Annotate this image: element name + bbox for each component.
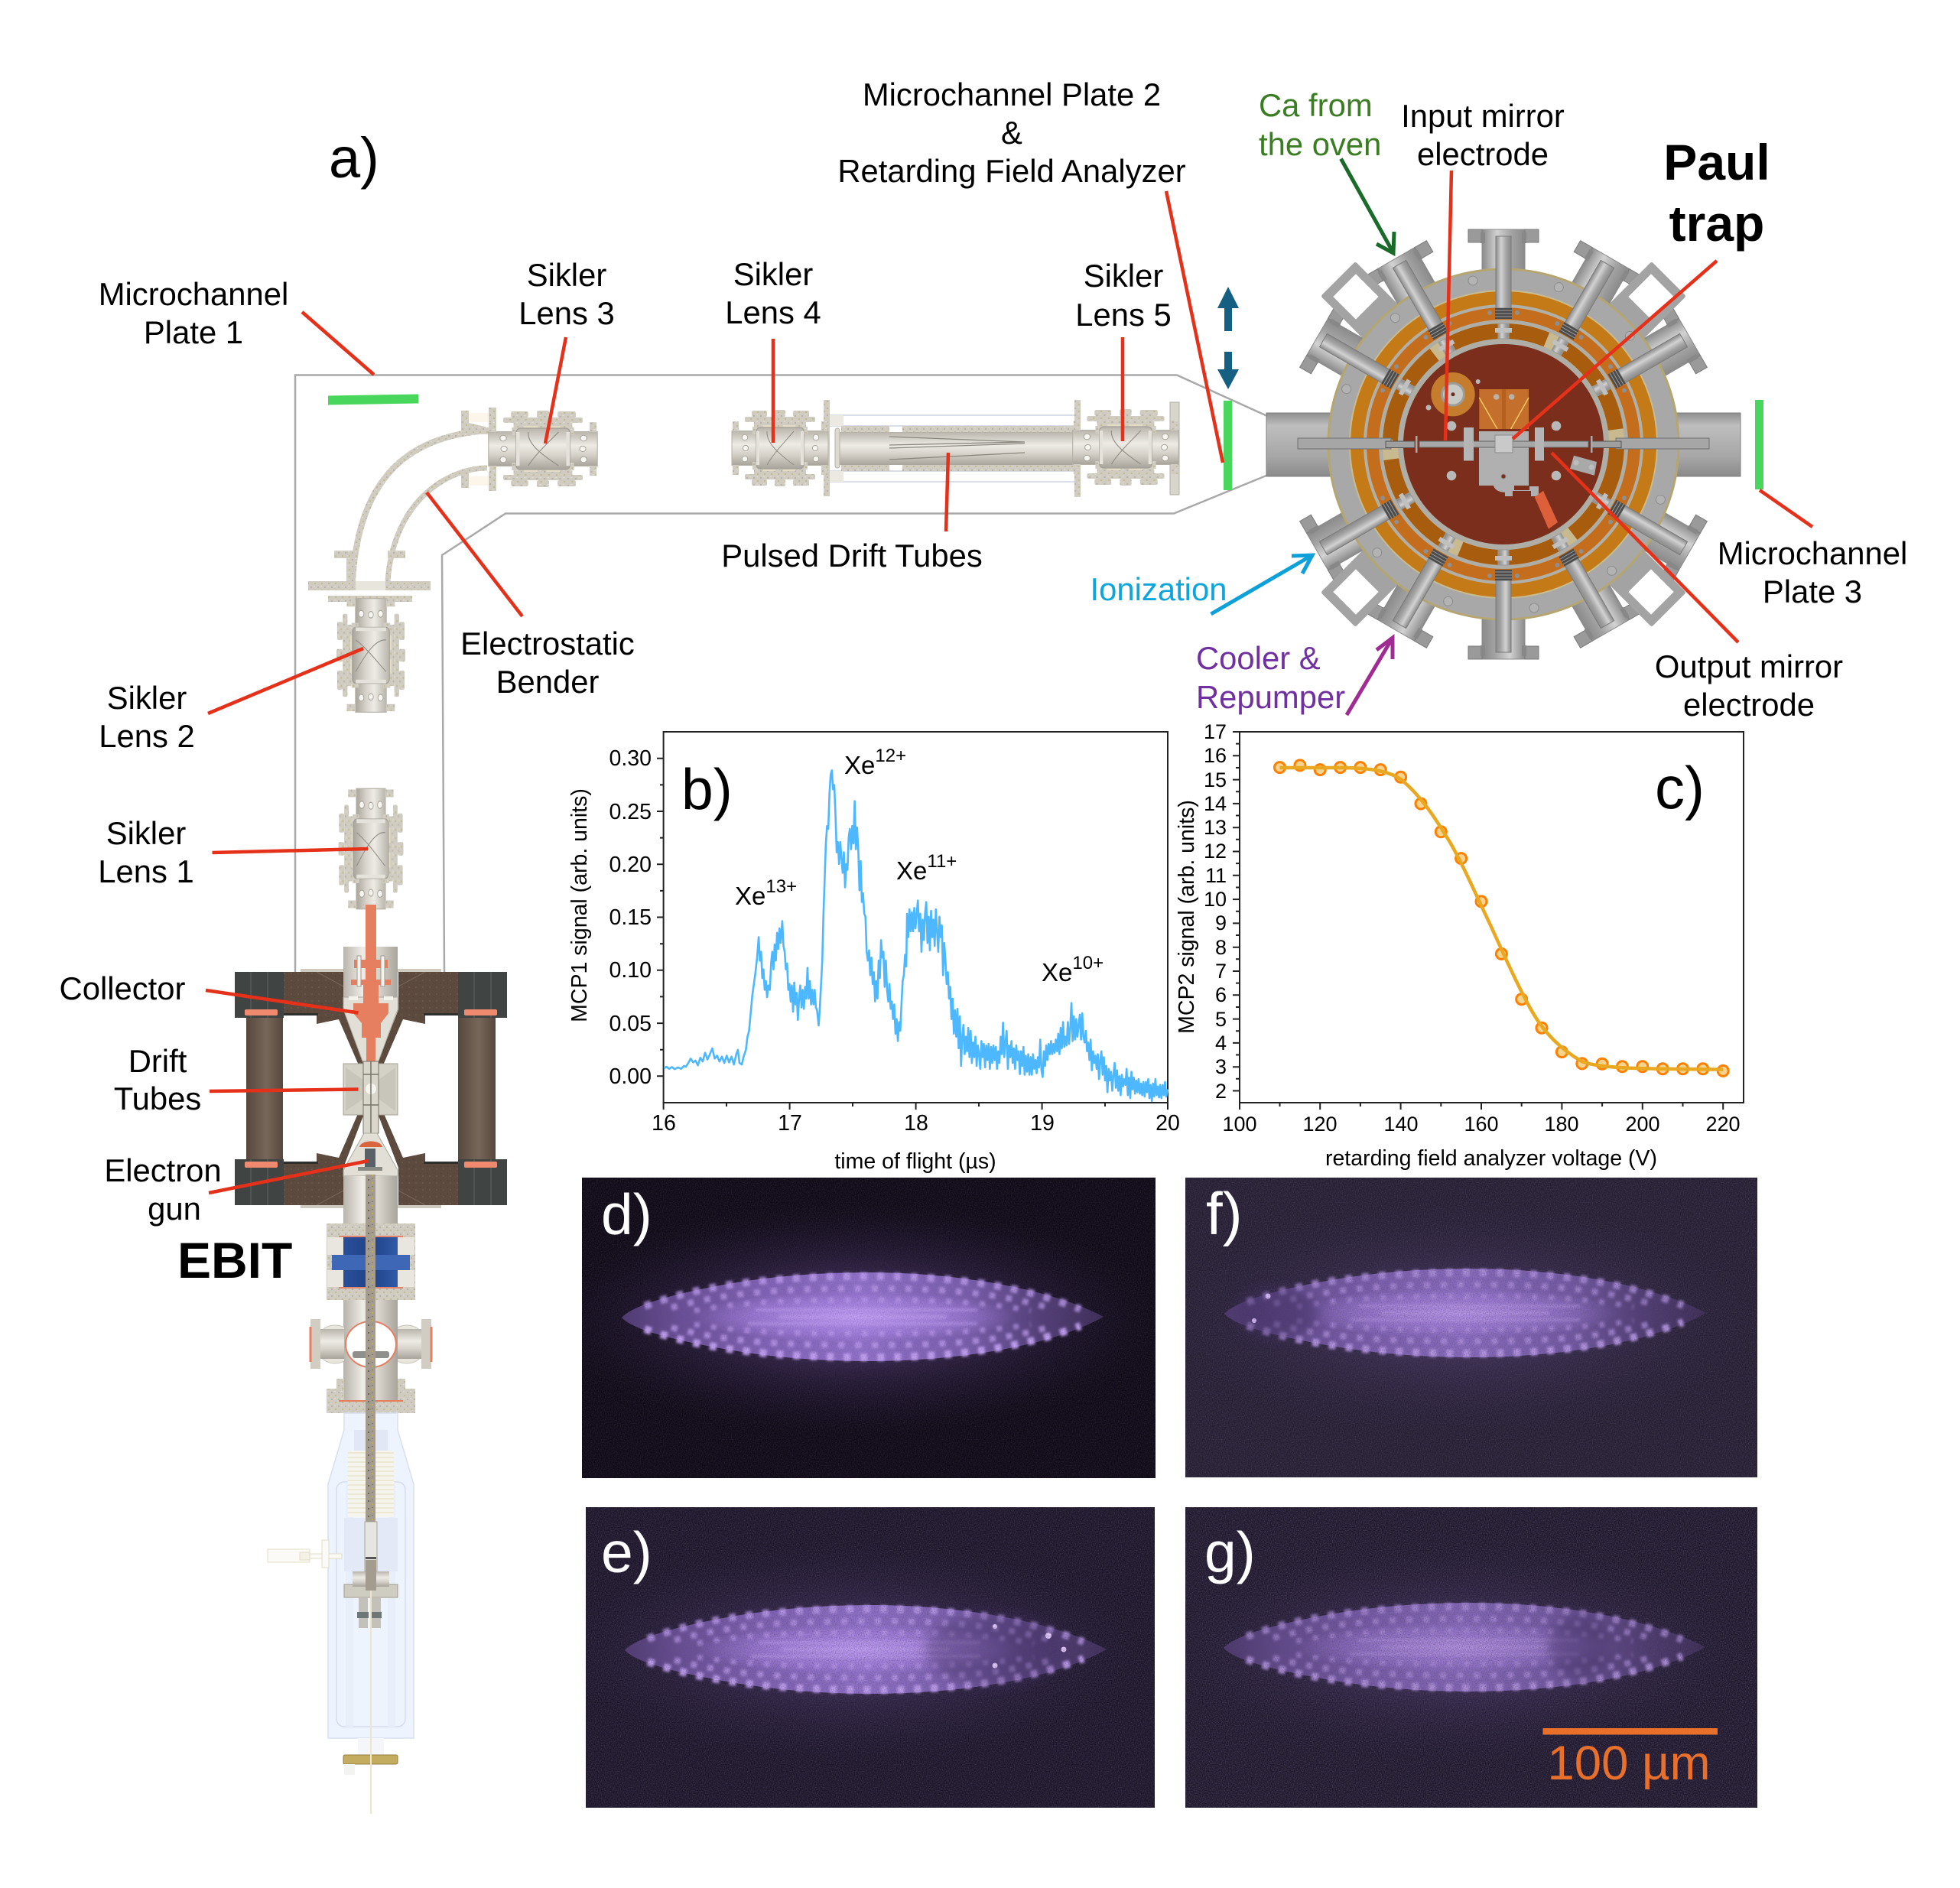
chamber disk and rings [1328, 269, 1679, 619]
panel c: retarding field chart [1175, 720, 1744, 1171]
label: Sikler Lens 5: Lens 5 [1075, 297, 1172, 333]
magnet coil flanges [327, 1223, 415, 1300]
chart b x axis title: time of flight (µs) [834, 1149, 996, 1174]
Sikler lens 3 [489, 411, 597, 487]
data points [1274, 760, 1728, 1076]
chart b y axis labels [609, 746, 652, 1089]
label: Microchannel Plate 1: Microchannel [99, 276, 288, 312]
orange cable [1535, 491, 1558, 529]
chart b y axis labels: 0.05 [609, 1012, 652, 1036]
EBIT assembly [235, 905, 507, 1814]
label: Ionization: Ionization [1091, 571, 1227, 607]
scale bar [1543, 1728, 1718, 1734]
label: Paul trap: trap [1669, 195, 1764, 252]
EBIT columns [246, 1018, 496, 1160]
chart c y axis labels: 15 [1204, 769, 1227, 791]
chart c y axis labels: 16 [1204, 744, 1227, 767]
EBIT magnet plates and cones [235, 969, 507, 1208]
chart b x axis labels [652, 1111, 1180, 1136]
peak label Xe11+: 11+ [927, 851, 957, 872]
peak label Xe10+: Xe [1042, 958, 1072, 986]
label: Microchannel Plate 2 and Retarding Field Analyzer: Microchannel Plate 2 [863, 76, 1161, 112]
peak label Xe10+: 10+ [1072, 953, 1104, 973]
trap mount block [1479, 431, 1539, 496]
electrode rods [1298, 427, 1709, 460]
label: Sikler Lens 4: Lens 4 [725, 294, 821, 330]
chart b frame and ticks [657, 732, 1168, 1110]
arrow: detector moves up [1217, 287, 1239, 331]
chart c x axis labels: 180 [1544, 1113, 1579, 1136]
label: Electrostatic Bender: Bender [496, 664, 599, 700]
peak label Xe13+: 13+ [765, 876, 797, 897]
Sikler lens 2 [336, 599, 405, 712]
label: Sikler Lens 1: Lens 1 [98, 853, 194, 889]
label: Input mirror electrode: Input mirror [1401, 98, 1565, 134]
label: Electrostatic Bender: Electrostatic [460, 626, 635, 661]
Sikler lens 5 [1073, 409, 1178, 486]
Paul trap assembly [1266, 229, 1741, 659]
radial port tubes [1300, 229, 1707, 659]
microchannel plate 3 [1755, 400, 1763, 489]
peak label Xe12+: 12+ [875, 746, 906, 766]
bellows [348, 1451, 394, 1517]
chart b x axis labels: 19 [1030, 1111, 1055, 1136]
label: Ca from the oven: Ca from [1259, 87, 1373, 123]
label: Sikler Lens 4: Sikler [733, 256, 813, 292]
label: Sikler Lens 1: Sikler [106, 815, 186, 851]
calcium oven [1431, 372, 1475, 416]
panel b: time of flight chart [567, 732, 1180, 1174]
beamline outline [295, 375, 1267, 972]
label: Sikler Lens 2: Sikler [107, 680, 187, 716]
chart c x axis title: retarding field analyzer voltage (V) [1325, 1146, 1657, 1171]
chart c x axis labels: 220 [1705, 1113, 1741, 1136]
mounting screws [1425, 379, 1561, 480]
arrow: calcium from oven [1341, 159, 1394, 253]
chart b y axis labels: 0.30 [609, 746, 652, 771]
fit curve [1280, 768, 1723, 1069]
label: Microchannel Plate 3: Microchannel [1718, 535, 1907, 571]
pulsed drift tubes [824, 400, 1179, 497]
chart c y axis labels: 8 [1215, 936, 1227, 959]
side ports and viewing chamber [310, 1301, 431, 1400]
Sikler lens 4 [732, 410, 828, 486]
label: Output mirror electrode: electrode [1683, 687, 1815, 723]
label: Cooler and Repumper: Cooler & [1196, 640, 1321, 676]
chart c y axis labels: 3 [1215, 1055, 1227, 1078]
chart b y axis labels: 0.00 [609, 1064, 652, 1089]
label: Microchannel Plate 2 and Retarding Field Analyzer: Retarding Field Analyzer [837, 153, 1186, 189]
chart c y axis labels: 13 [1204, 816, 1227, 839]
chart c y axis labels: 14 [1204, 792, 1227, 815]
arrow: ionization [1211, 555, 1312, 614]
panel label e: e) [601, 1520, 652, 1584]
chart c y axis labels: 12 [1204, 840, 1227, 863]
chart c x axis labels: 100 [1222, 1113, 1257, 1136]
chart c y axis labels: 6 [1215, 983, 1227, 1006]
label: Drift Tubes: Tubes [114, 1080, 201, 1116]
central feedthrough rod [366, 1175, 375, 1522]
collector [349, 905, 393, 1061]
gold wheel [343, 1591, 398, 1814]
panel f: ion crystal image [1162, 1178, 1759, 1477]
chart c frame and ticks [1233, 732, 1744, 1110]
chart b y axis title: MCP1 signal (arb. units) [567, 788, 592, 1022]
chart c y axis labels [1204, 720, 1227, 1103]
chart b x axis labels: 18 [904, 1111, 928, 1136]
panel d: ion crystal image [547, 1178, 1159, 1478]
panel label f: f) [1206, 1180, 1243, 1247]
panel label c: c) [1655, 754, 1705, 821]
electrostatic bender [308, 408, 496, 602]
electron gun housing [343, 1133, 398, 1176]
drift tube section [343, 1061, 398, 1133]
chart c x axis labels: 160 [1464, 1113, 1499, 1136]
label: Sikler Lens 3: Lens 3 [518, 295, 615, 331]
label: Sikler Lens 2: Lens 2 [99, 718, 195, 754]
panel label a: a) [329, 126, 379, 190]
microchannel plate 1 [328, 395, 418, 405]
panel label b: b) [681, 757, 733, 821]
panel g: ion crystal image [1166, 1507, 1757, 1808]
label: Output mirror electrode: Output mirror [1655, 648, 1843, 684]
label: Input mirror electrode: electrode [1417, 136, 1549, 172]
chart b x axis labels: 16 [652, 1111, 676, 1136]
red callout leaders [206, 171, 1812, 1193]
chart b x axis labels: 17 [778, 1111, 802, 1136]
glass enclosure [328, 1413, 414, 1738]
chart b y axis labels: 0.10 [609, 958, 652, 983]
chart b y axis labels: 0.20 [609, 853, 652, 877]
chart c x axis labels: 120 [1302, 1113, 1338, 1136]
microchannel plate 2 [1224, 401, 1232, 490]
Sikler lens 1 [338, 788, 404, 909]
chart c y axis labels: 9 [1215, 912, 1227, 934]
chart c x axis labels: 140 [1383, 1113, 1419, 1136]
lower flange [327, 1379, 415, 1413]
arrow: cooler and repumper [1347, 638, 1393, 715]
mounting brackets [1321, 262, 1686, 627]
label: Electron gun: gun [148, 1191, 201, 1227]
chart c y axis labels: 5 [1215, 1008, 1227, 1031]
chart c x axis labels: 200 [1625, 1113, 1660, 1136]
panel label d: d) [601, 1182, 652, 1246]
label: Microchannel Plate 1: Plate 1 [144, 314, 243, 350]
panel label g: g) [1204, 1520, 1256, 1584]
chart b y axis labels: 0.25 [609, 800, 652, 824]
chart c y axis labels: 4 [1215, 1032, 1227, 1054]
label: Drift Tubes: Drift [128, 1043, 187, 1079]
peak label Xe11+: Xe [896, 856, 927, 885]
label: Microchannel Plate 3: Plate 3 [1763, 574, 1862, 609]
label: Paul trap: Paul [1663, 134, 1770, 190]
panel e: ion crystal image [558, 1507, 1155, 1808]
label: EBIT: EBIT [177, 1232, 292, 1288]
label: Electron gun: Electron [104, 1152, 222, 1188]
time of flight spectrum line [664, 770, 1168, 1101]
lower vacuum tube [343, 1176, 398, 1401]
label: Microchannel Plate 2 and Retarding Field Analyzer: & [1001, 115, 1022, 151]
peak label Xe13+: Xe [735, 882, 765, 910]
label: Pulsed Drift Tubes: Pulsed Drift Tubes [721, 538, 983, 574]
feedthrough base [344, 1522, 398, 1628]
upper vacuum tube [343, 947, 398, 1065]
chart c y axis labels: 2 [1215, 1080, 1227, 1103]
label: Sikler Lens 3: Sikler [527, 257, 606, 293]
label: Collector: Collector [60, 970, 186, 1006]
chart c y axis labels: 17 [1204, 720, 1227, 743]
label: Cooler and Repumper: Repumper [1196, 679, 1345, 715]
chart b x axis labels: 20 [1156, 1111, 1180, 1136]
label: Ca from the oven: the oven [1259, 126, 1381, 162]
chart c y axis title: MCP2 signal (arb. units) [1175, 800, 1199, 1034]
peak label Xe12+: Xe [844, 751, 875, 779]
arrow: detector moves down [1217, 352, 1239, 389]
chart c y axis labels: 10 [1204, 888, 1227, 911]
chart c y axis labels: 7 [1215, 960, 1227, 983]
blue magnet [332, 1236, 410, 1288]
scale bar label: 100 µm [1547, 1737, 1711, 1790]
chart c x axis labels [1222, 1113, 1741, 1136]
label: Sikler Lens 5: Sikler [1084, 258, 1163, 294]
small chip [1570, 456, 1597, 476]
chart b y axis labels: 0.15 [609, 905, 652, 930]
chart c y axis labels: 11 [1205, 864, 1227, 887]
horizontal ports [1266, 413, 1741, 476]
radial port rods [1305, 236, 1702, 652]
orange shield [1479, 389, 1529, 429]
micrometer [268, 1540, 342, 1568]
